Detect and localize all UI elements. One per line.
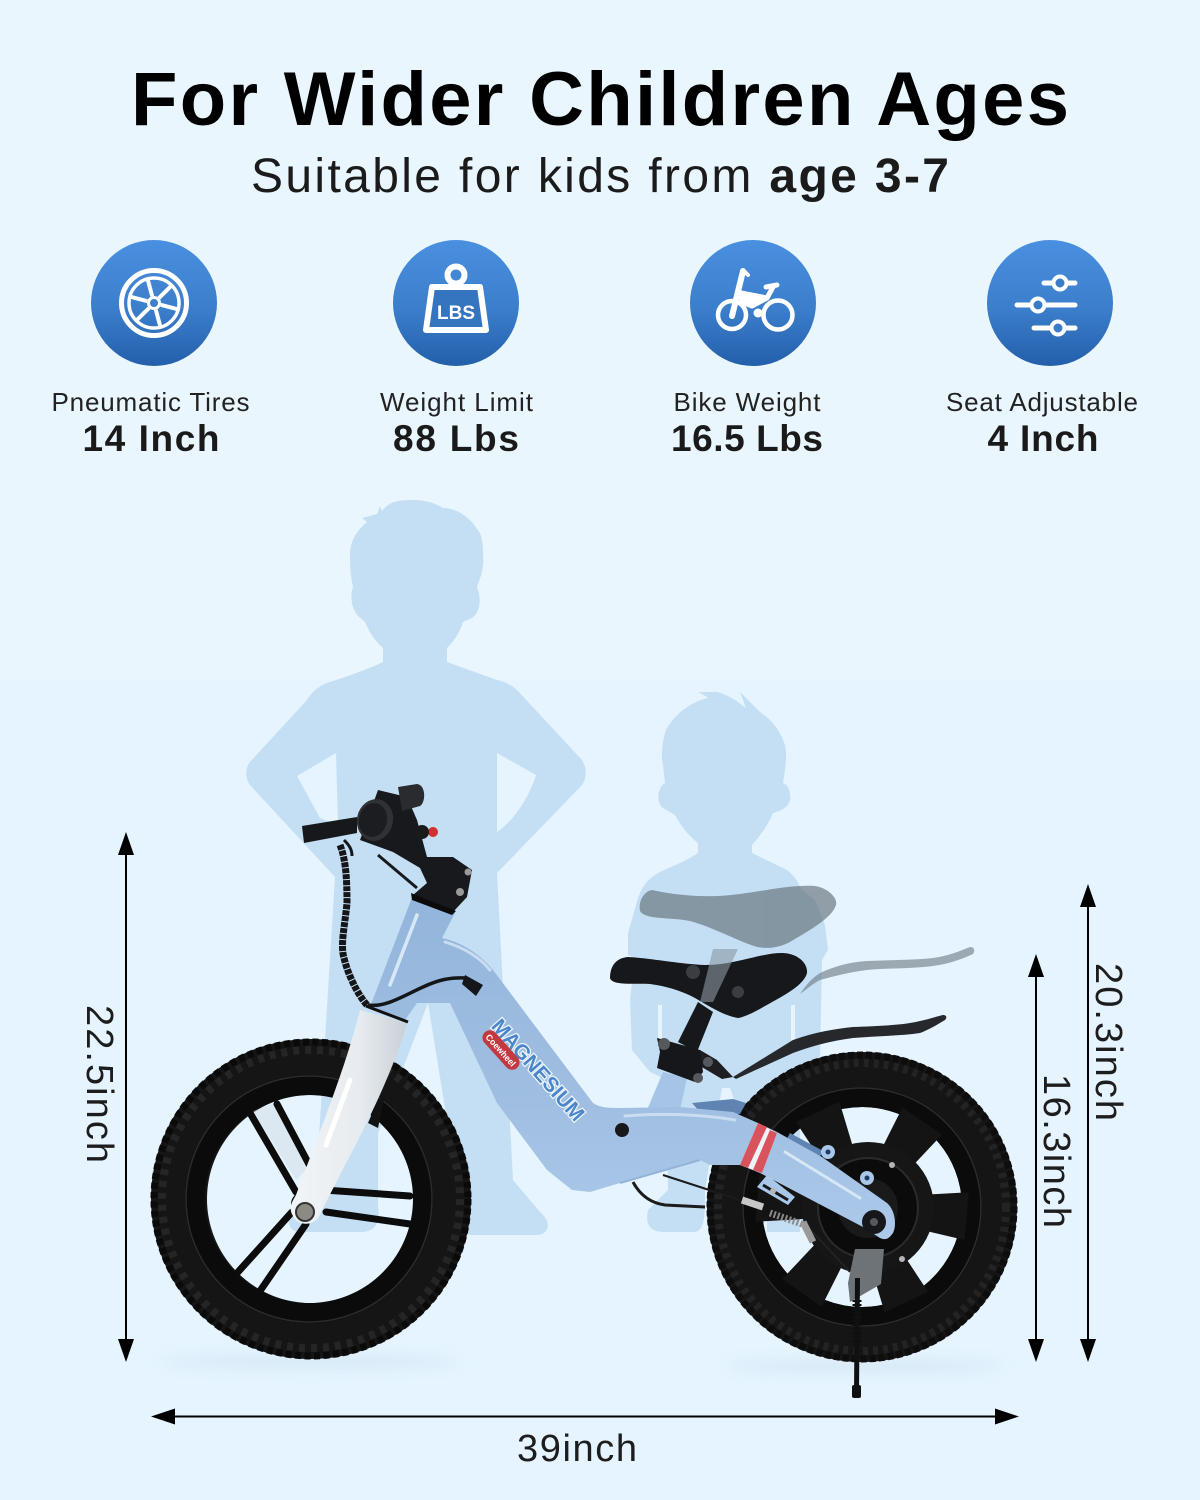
brake caliper [368, 1095, 385, 1128]
spokes [755, 1102, 969, 1312]
highlight [785, 1152, 860, 1198]
saddle [610, 953, 807, 1018]
arrow [1080, 884, 1096, 1362]
label: 39inch [517, 1428, 637, 1470]
fender stay [690, 1050, 733, 1079]
rear wheel [710, 1055, 1014, 1359]
value: 88 Lbs [393, 418, 519, 459]
silhouette: younger child [628, 692, 828, 1232]
stat: weight limit [380, 240, 534, 459]
value: 4 Inch [988, 418, 1098, 459]
headset [411, 893, 456, 915]
arrow [1028, 954, 1044, 1362]
frame [370, 895, 895, 1239]
value: 16.5 Lbs [671, 418, 823, 459]
stat: pneumatic tires [52, 240, 250, 459]
stat: bike weight [671, 240, 823, 459]
label: Bike Weight [674, 387, 821, 417]
icon: weight: LBS [437, 303, 475, 324]
collar [366, 1006, 408, 1022]
brake cable [378, 855, 417, 888]
cable plug [462, 975, 483, 996]
icon: tire [91, 240, 217, 366]
bolts [464, 868, 472, 876]
highlight [390, 915, 417, 985]
fender [733, 1015, 946, 1079]
value: 14 Inch [82, 418, 220, 459]
label: 20.3inch [1087, 963, 1129, 1121]
tire [710, 1055, 1014, 1359]
bolt [615, 1123, 629, 1137]
lug holes [826, 1150, 870, 1180]
rim [743, 1088, 981, 1326]
label: 16.3inch [1035, 1074, 1077, 1228]
label: 22.5inch [78, 1005, 120, 1163]
icon: bike [690, 240, 816, 366]
silhouette: older child [246, 500, 586, 1235]
underside shade [620, 1160, 700, 1183]
brake lever [302, 817, 357, 843]
rear brake cables [633, 1175, 740, 1207]
front spokes [238, 1104, 410, 1291]
dimension: low seat height [1028, 954, 1077, 1362]
badge [479, 1027, 523, 1073]
hub motor [802, 1142, 934, 1274]
cables [340, 840, 467, 1005]
dimension: high seat height [1080, 884, 1129, 1362]
dimension: bike length [151, 1408, 1019, 1470]
label: Seat Adjustable [946, 387, 1138, 417]
stripes [740, 1123, 777, 1173]
badge: Coewheel [484, 1032, 518, 1069]
saddle bolts [686, 965, 744, 998]
ground shadow [160, 1357, 1005, 1371]
label: Weight Limit [380, 387, 534, 417]
stat: seat adjustable [946, 240, 1138, 459]
brand text: MAGNESIUM [487, 1015, 589, 1126]
dark rear brace [692, 1099, 825, 1160]
grip far [398, 784, 424, 811]
ghost seat post [700, 949, 738, 1002]
kickstand [848, 1249, 884, 1398]
dimension: wheel to handlebar [78, 832, 134, 1362]
rear brake and spring [742, 1200, 850, 1272]
icon: sliders [987, 240, 1113, 366]
fork [291, 1006, 408, 1224]
bolt [296, 1203, 314, 1221]
rear brake bracket [757, 1175, 795, 1205]
rim [186, 1076, 432, 1322]
tire [154, 1042, 468, 1356]
seat tube [647, 1072, 687, 1110]
seat post [678, 1002, 713, 1052]
subtitle: Suitable for kids from age 3-7 [251, 150, 949, 203]
main frame [370, 895, 895, 1239]
spoke inner bar [253, 1102, 310, 1180]
stem [360, 790, 472, 912]
stem and controls [302, 784, 472, 915]
grip near [353, 796, 397, 844]
icon: weight [393, 240, 519, 366]
ghost raised seat and fender [640, 886, 974, 994]
arm lugs [821, 1145, 874, 1185]
seat clamp [657, 1038, 713, 1083]
label: Pneumatic Tires [52, 387, 250, 417]
arrow [151, 1408, 1019, 1424]
front wheel [154, 1042, 468, 1356]
arrow [118, 832, 134, 1362]
red button [428, 827, 438, 837]
highlight [445, 942, 735, 1120]
title: For Wider Children Ages [131, 57, 1069, 142]
axle nut [862, 1210, 886, 1234]
